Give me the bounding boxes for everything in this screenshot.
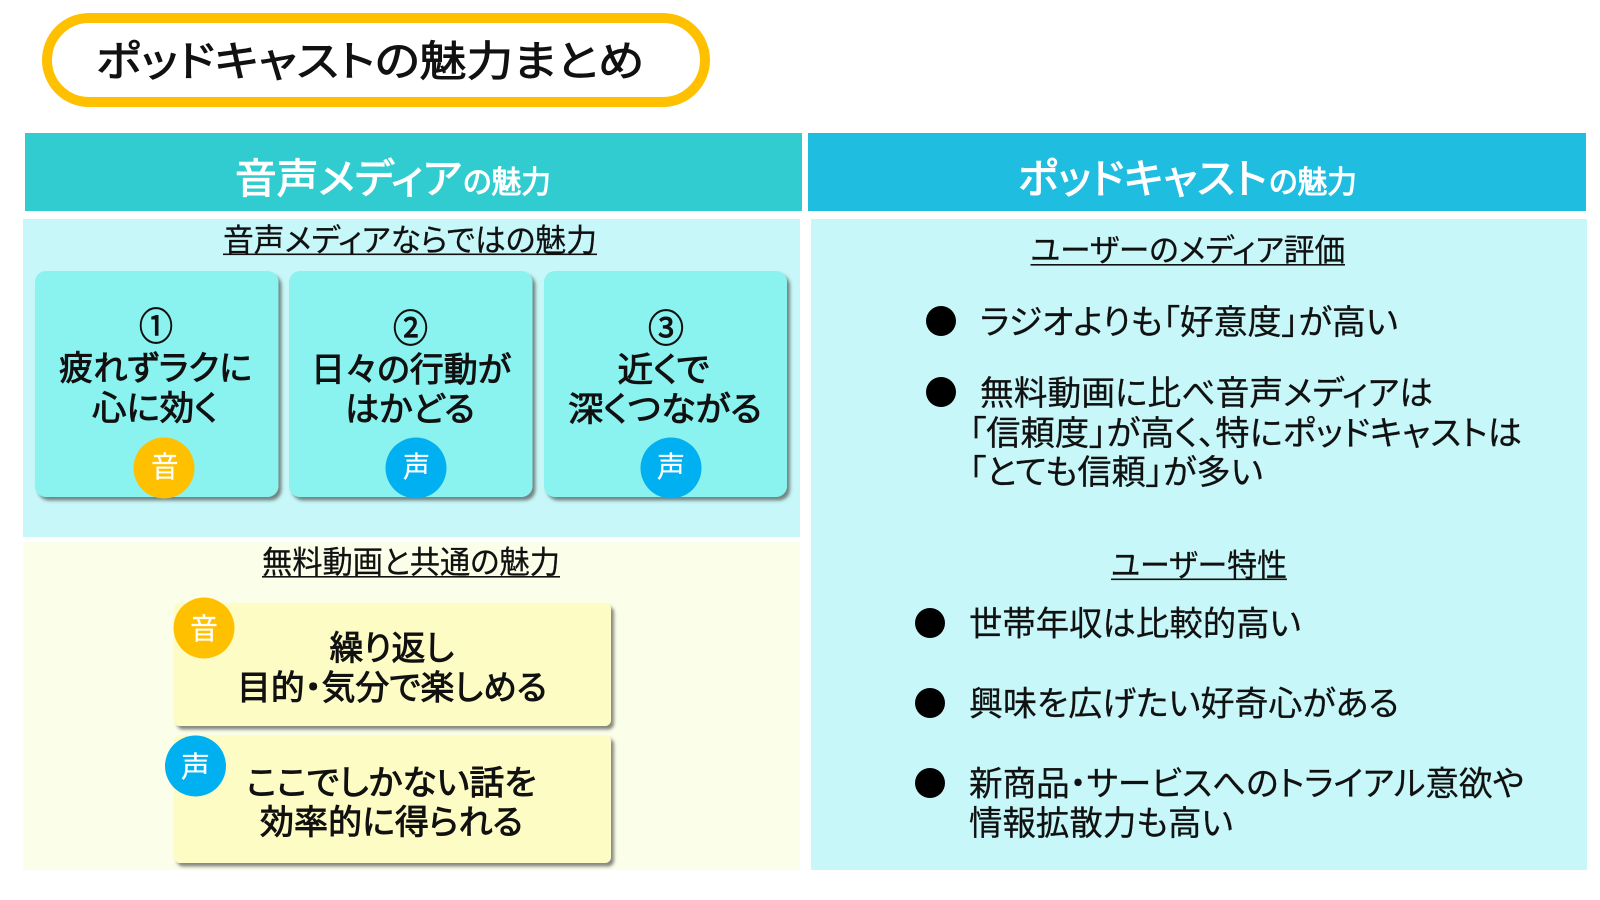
subheading: user traits: ユーザー特性 [1111, 547, 1287, 583]
subheading: audio-only appeal: 音声メディアならではの魅力 [223, 222, 597, 258]
card 2: ② [393, 309, 428, 351]
card 3: 深くつながる [568, 391, 762, 429]
header: audio media [25, 133, 802, 211]
panel: podcast appeal [811, 219, 1587, 870]
card: exclusive talk [165, 735, 611, 863]
card 1: 疲れずラクに [59, 350, 252, 388]
card: repeat: 目的・気分で楽しめる [237, 670, 547, 708]
card 3: ③ [648, 309, 684, 351]
bullet: trust: 「とても信頼」が多い [969, 454, 1263, 492]
card 1: ① [139, 307, 173, 349]
badge: voice [640, 438, 702, 498]
card: repeat: 繰り返し [330, 630, 454, 668]
bullet: trust: 無料動画に比べ音声メディアは [980, 375, 1433, 413]
subheading: shared appeal: 無料動画と共通の魅力 [262, 544, 560, 580]
card 3: 近くで [618, 352, 710, 390]
panel: shared appeal with free video [23, 542, 800, 870]
bullet: trust: 「信頼度」が高く、特にポッドキャストは [969, 415, 1522, 453]
badge: sound [174, 598, 234, 658]
badge: sound [134, 438, 194, 498]
card 2: 日々の行動が [311, 352, 512, 390]
bullet: income: 世帯年収は比較的高い [969, 606, 1301, 644]
badge: voice [165, 736, 226, 796]
subheading: user media evaluation: ユーザーのメディア評価 [1030, 232, 1345, 268]
bullet: trial and spread: 情報拡散力も高い [969, 805, 1233, 843]
badge: voice: 声 [181, 751, 210, 784]
bullet: curiosity: 興味を広げたい好奇心がある [969, 686, 1399, 724]
header: podcast: の魅力 [1269, 165, 1357, 200]
header: podcast [808, 133, 1586, 211]
bullet: favorability: ラジオよりも「好意度」が高い [980, 304, 1398, 342]
panel: audio-only appeal [23, 219, 800, 537]
title pill [47, 18, 705, 102]
header: podcast: ポッドキャスト [1018, 156, 1267, 202]
header: audio media: 音声メディア [235, 156, 462, 202]
bullet: trial and spread [915, 766, 1524, 843]
bullet: trust [926, 375, 1522, 492]
badge: voice [386, 438, 446, 498]
title text: ポッドキャストの魅力まとめ [96, 38, 644, 85]
card 1 [35, 271, 278, 498]
bullet: trial and spread: 新商品・サービスへのトライアル意欲や [969, 766, 1524, 804]
card: repeat [174, 598, 611, 726]
card: exclusive talk: 効率的に得られる [260, 804, 523, 842]
badge: voice: 声 [403, 451, 430, 484]
card 1: 心に効く [92, 390, 218, 428]
card 2: はかどる [345, 391, 475, 429]
card 3 [544, 271, 787, 498]
card: exclusive talk: ここでしかない話を [246, 764, 536, 802]
card 2 [289, 271, 532, 498]
header: audio media: の魅力 [463, 165, 551, 200]
badge: sound: 音 [151, 451, 178, 484]
badge: voice: 声 [657, 451, 685, 484]
badge: sound: 音 [190, 613, 218, 646]
